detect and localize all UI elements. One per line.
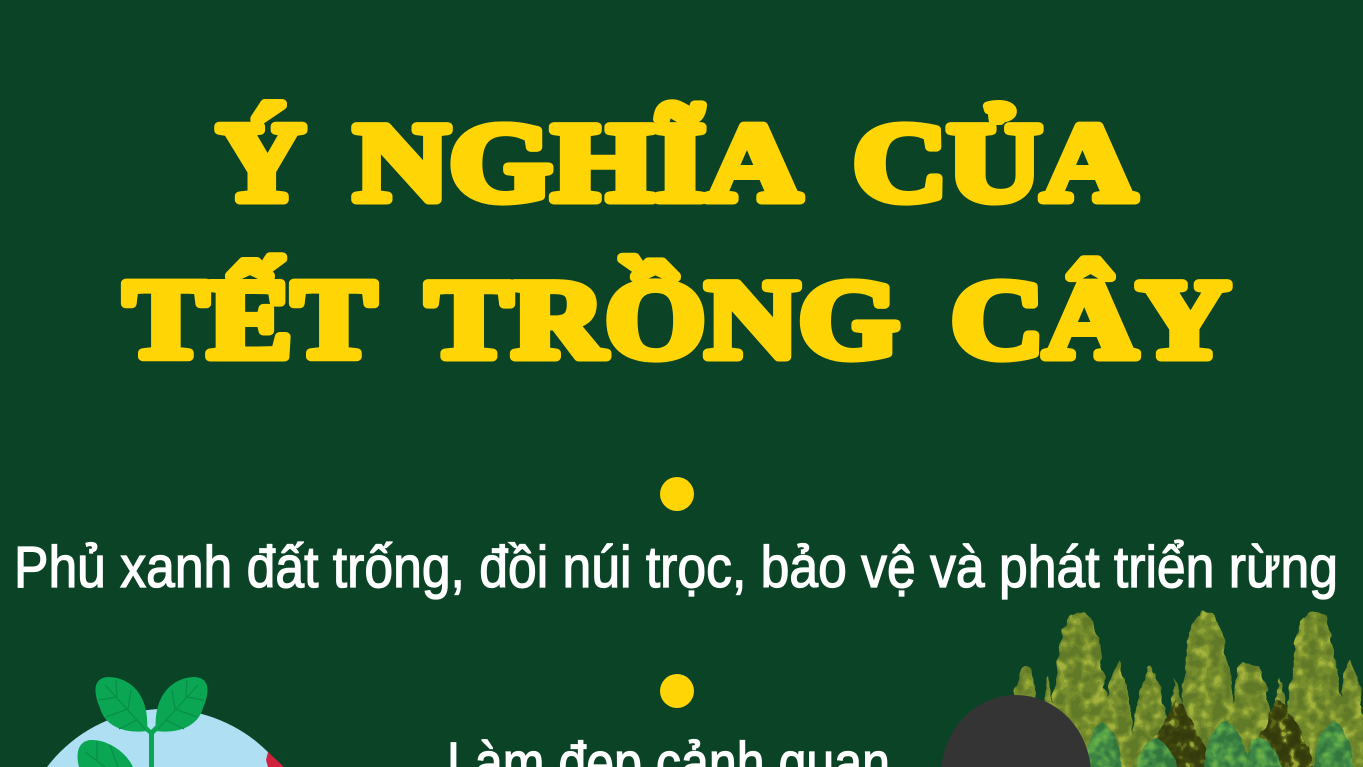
olive tree layer: [1012, 612, 1363, 767]
title line 2: CÂY: [951, 258, 1230, 382]
bullet dot 1: [660, 477, 694, 511]
seedling stem: [140, 723, 162, 767]
green tree layer: [1085, 720, 1354, 767]
right leaf: [156, 677, 208, 732]
icon: globe with seedling: [17, 677, 311, 767]
globe red segment: [266, 752, 284, 767]
title line 2: [124, 256, 1230, 382]
left leaf: [95, 677, 147, 732]
title line 1: [217, 101, 1136, 225]
dark tree layer: [1148, 700, 1314, 767]
globe: [17, 709, 311, 767]
title: [124, 101, 1230, 382]
title line 1: NGHĨA: [354, 101, 801, 225]
lower leaf: [78, 740, 133, 767]
title line 1: Ý: [217, 101, 305, 225]
title line 2: TRỒNG: [426, 256, 899, 382]
illustration: forest: [1012, 612, 1363, 767]
title line 2: TẾT: [124, 257, 376, 382]
bullet dot 2: [660, 674, 694, 708]
title line 1: CỦA: [853, 101, 1136, 225]
dark rounded shape: [941, 695, 1091, 767]
